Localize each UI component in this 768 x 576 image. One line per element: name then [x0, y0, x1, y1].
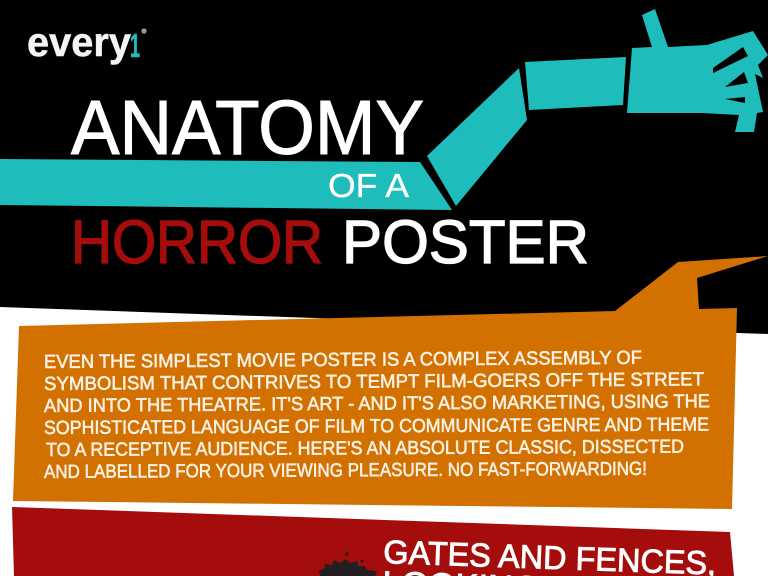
title: horror: HORROR	[71, 208, 323, 276]
orange speech bubble panel	[13, 256, 768, 509]
intro text block: AND INTO THE THEATRE. IT'S ART - AND IT'S ALSO MARKETING, USING THE	[44, 391, 710, 417]
intro text block: SYMBOLISM THAT CONTRIVES TO TEMPT FILM-GOERS OFF THE STREET	[44, 369, 704, 395]
forearm segment	[427, 68, 527, 206]
intro text block	[44, 348, 710, 483]
icon: reaching teal arm and hand	[427, 9, 768, 206]
intro text block: SOPHISTICATED LANGUAGE OF FILM TO COMMUNICATE GENRE AND THEME	[44, 415, 709, 439]
intro text block: EVEN THE SIMPLEST MOVIE POSTER IS A COMPLEX ASSEMBLY OF	[44, 348, 642, 373]
title: poster: POSTER	[342, 208, 589, 276]
icon: black ink splat	[319, 552, 377, 576]
title: of a: OF A	[328, 167, 409, 204]
finger gaps	[713, 47, 748, 103]
intro text block: TO A RECEPTIVE AUDIENCE. HERE'S AN ABSOLUTE CLASSIC, DISSECTED	[46, 437, 684, 461]
hand with thumb and fingers	[627, 9, 768, 132]
wrist segment	[525, 57, 626, 110]
red panel	[12, 507, 734, 576]
logo: every1: 1	[130, 27, 140, 64]
logo: every1: every	[27, 19, 131, 65]
title: anatomy: ANATOMY	[71, 85, 424, 171]
black header background	[0, 0, 768, 334]
intro text block: AND LABELLED FOR YOUR VIEWING PLEASURE. NO FAST-FORWARDING!	[44, 459, 647, 483]
teal arm band	[0, 159, 452, 210]
